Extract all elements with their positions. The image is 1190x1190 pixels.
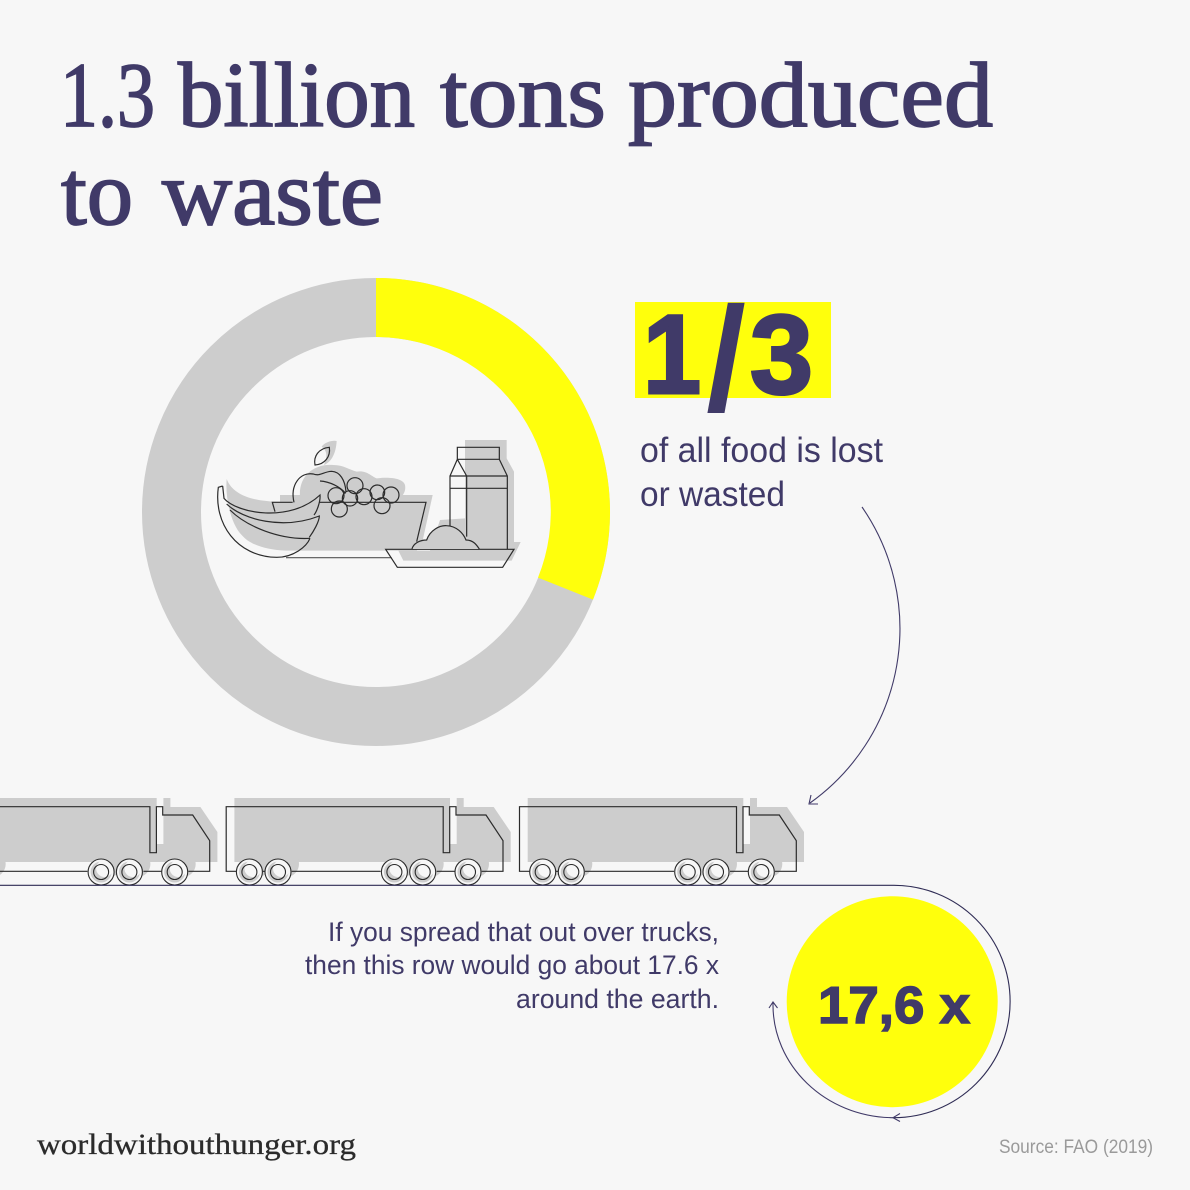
text: of all food is lost or wasted: of all food is lost xyxy=(640,431,883,470)
grapes xyxy=(347,478,363,494)
arrow: curved from text to trucks xyxy=(809,507,900,804)
bananas xyxy=(218,486,310,557)
one third callout: / xyxy=(706,277,746,442)
text: spread over trucks: then this row would go about 17.6 x xyxy=(305,950,719,980)
title: tons xyxy=(440,44,606,146)
truck row xyxy=(0,798,804,885)
icon: food group xyxy=(218,440,521,567)
text: of all food is lost or wasted xyxy=(640,431,883,514)
title: waste xyxy=(162,142,383,244)
text: of all food is lost or wasted: or wasted xyxy=(640,475,785,514)
milk carton xyxy=(450,447,507,549)
apple xyxy=(293,471,346,502)
title xyxy=(60,44,993,244)
title: to xyxy=(61,142,133,244)
circle: 17,6 x xyxy=(787,896,998,1107)
food pile xyxy=(412,526,479,549)
one third callout: 1 xyxy=(643,292,701,417)
donut chart: one third of food xyxy=(172,278,610,716)
plate xyxy=(386,549,514,567)
text: spread over trucks xyxy=(305,917,719,1014)
one third callout xyxy=(635,277,831,442)
website: worldwithouthunger.org xyxy=(37,1128,356,1161)
ground line and circling arrow xyxy=(0,885,1010,1122)
title: produced xyxy=(628,44,993,146)
one third callout: 3 xyxy=(750,292,813,417)
source: Source: FAO (2019) xyxy=(999,1137,1153,1158)
text: spread over trucks: If you spread that out over trucks, xyxy=(328,917,719,947)
title: billion xyxy=(178,44,415,146)
circle: 17,6 x: 17,6 x xyxy=(818,977,970,1035)
title: 1.3 xyxy=(60,44,155,146)
bowl xyxy=(272,502,426,542)
text: spread over trucks: around the earth. xyxy=(516,984,719,1014)
